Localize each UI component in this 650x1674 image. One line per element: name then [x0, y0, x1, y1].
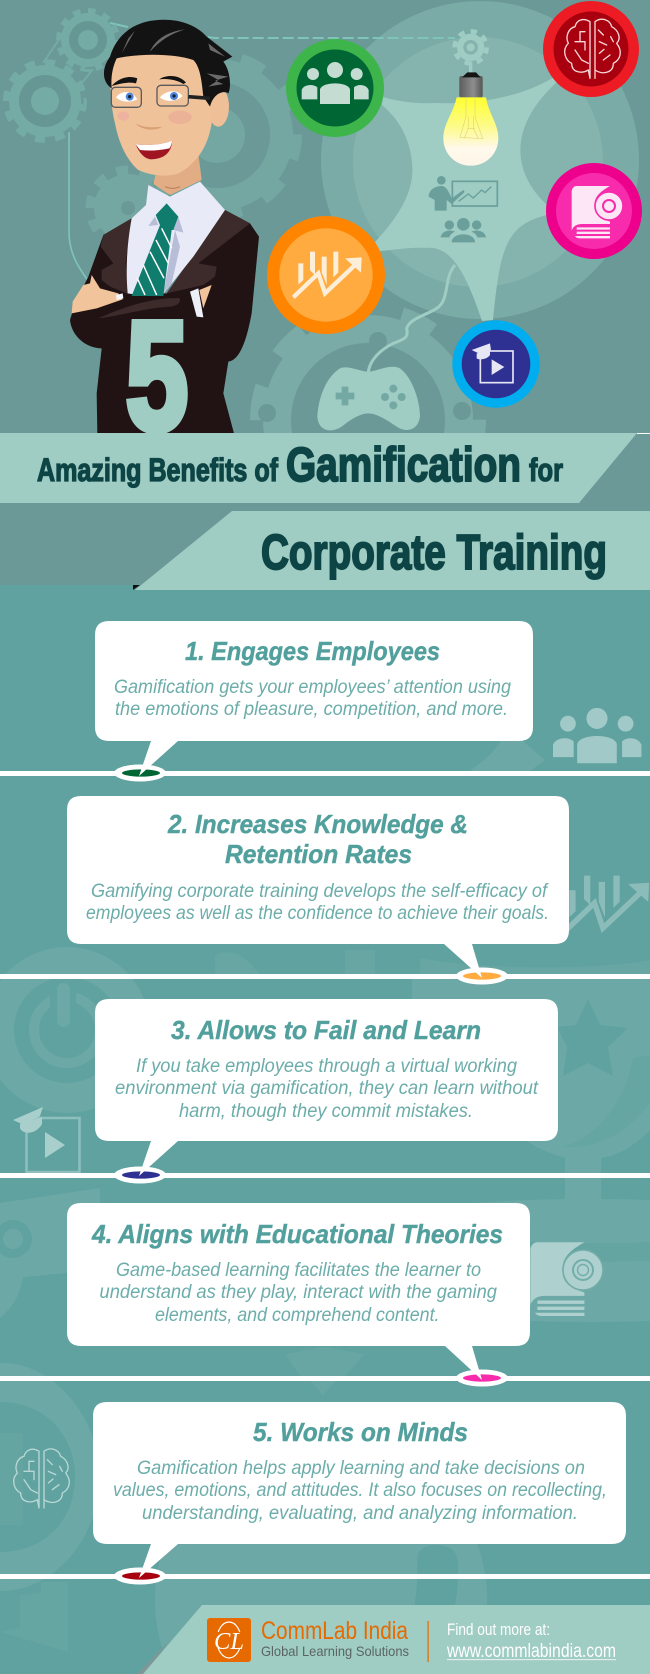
- body line 1: If you take employees through a virtual working: [136, 1055, 517, 1077]
- background: faded brain ring: [0, 1363, 100, 1591]
- body line 2: understand as they play, interact with the gaming: [100, 1281, 497, 1303]
- background: faded ring behind card 5: [155, 1434, 487, 1674]
- speech bubble: [67, 796, 569, 978]
- marker: green: [114, 764, 166, 782]
- background: faded star lower: [285, 1347, 365, 1376]
- heading: 1. Engages Employees: [185, 636, 440, 666]
- background icon: faded video lesson: [13, 1107, 80, 1172]
- footer: [137, 1605, 650, 1674]
- body line 2: the emotions of pleasure, competition, and more.: [115, 698, 508, 720]
- body line 1: Gamification gets your employees’ attention using: [114, 676, 511, 698]
- body line 2: employees as well as the confidence to achieve their goals.: [86, 902, 549, 924]
- heading line 1: 2. Increases Knowledge &: [167, 809, 468, 839]
- icon: pink book badge: [546, 163, 642, 259]
- background icon: faded power button: [0, 947, 150, 1113]
- dividers and markers: [0, 771, 650, 1579]
- tie: [132, 203, 178, 296]
- marker: magenta: [456, 1370, 508, 1386]
- left gears and connector: [6, 11, 455, 286]
- illustration: businessman head: [104, 20, 232, 195]
- icon: green people badge: [286, 39, 384, 137]
- heading: 5. Works on Minds: [253, 1417, 468, 1447]
- title band 1: [0, 433, 650, 503]
- heading: 3. Allows to Fail and Learn: [171, 1015, 481, 1045]
- background icon: faded people: [553, 708, 641, 763]
- icon: orange growth chart badge: [267, 216, 385, 334]
- body line 1: Gamifying corporate training develops the self-efficacy of: [91, 880, 549, 902]
- marker: red: [114, 1568, 166, 1584]
- background icon: faded growth chart: [563, 876, 649, 933]
- body line 3: understanding, evaluating, and analyzing information.: [142, 1502, 578, 1524]
- marker: navy: [114, 1166, 166, 1184]
- logo tagline: Global Learning Solutions: [261, 1643, 409, 1659]
- title text: Amazing Benefits of: Amazing Benefits of: [37, 452, 278, 488]
- background: faded cog band behind card 3: [215, 950, 650, 974]
- website: www.commlabindia.com: [446, 1641, 616, 1662]
- heading line 2: Retention Rates: [225, 839, 412, 869]
- header background: [0, 0, 650, 590]
- speech bubble: [93, 1402, 626, 1578]
- body line 2: environment via gamification, they can learn without: [115, 1077, 539, 1099]
- body line 2: values, emotions, and attitudes. It also focuses on recollecting,: [113, 1479, 607, 1501]
- illustration: businessman body: [70, 182, 259, 433]
- speech bubble: [67, 1203, 530, 1380]
- background icon: faded trophy with star: [330, 979, 650, 1322]
- body line 1: Game-based learning facilitates the learner to: [116, 1259, 481, 1281]
- panel: benefit 5: [93, 1402, 626, 1584]
- icon: hanging gear, light bulb and trainer: [429, 31, 498, 211]
- icon: audience group: [441, 218, 486, 242]
- background icon: faded gear left: [0, 1188, 100, 1318]
- body line 3: harm, though they commit mistakes.: [179, 1100, 473, 1122]
- background: faded star and hints: [470, 730, 545, 771]
- panel: benefit 1: [95, 621, 533, 782]
- light beam shape: [375, 73, 560, 321]
- logo name: CommLab India: [261, 1617, 408, 1645]
- background: faded bars bottom left: [0, 1582, 68, 1652]
- logo mark: CL: [214, 1629, 244, 1655]
- body line 1: Gamification helps apply learning and take decisions on: [137, 1457, 585, 1479]
- icon: blue video lesson badge: [452, 320, 540, 408]
- title band 2: [133, 511, 650, 590]
- title text: Gamification: Gamification: [286, 439, 521, 492]
- background icon: faded brain: [14, 1449, 69, 1508]
- main background: [0, 585, 650, 1674]
- speech bubble: [95, 621, 533, 776]
- panel: benefit 2: [67, 796, 569, 984]
- header background decoration: gears and glow: [86, 1, 639, 433]
- find out more: Find out more at:: [447, 1620, 550, 1639]
- background icon: faded book: [530, 1242, 603, 1316]
- icon: game controller with cord: [317, 265, 455, 430]
- panel: benefit 3: [95, 999, 558, 1184]
- speech bubble: [95, 999, 558, 1176]
- title text: for: for: [529, 452, 563, 488]
- marker: orange: [456, 968, 508, 984]
- logo mark: [207, 1618, 251, 1662]
- big number 5: 5: [126, 290, 188, 462]
- icon: red brain badge: [543, 1, 639, 97]
- body line 3: elements, and comprehend content.: [155, 1304, 440, 1326]
- panel: benefit 4: [67, 1203, 530, 1386]
- heading: 4. Aligns with Educational Theories: [91, 1219, 503, 1249]
